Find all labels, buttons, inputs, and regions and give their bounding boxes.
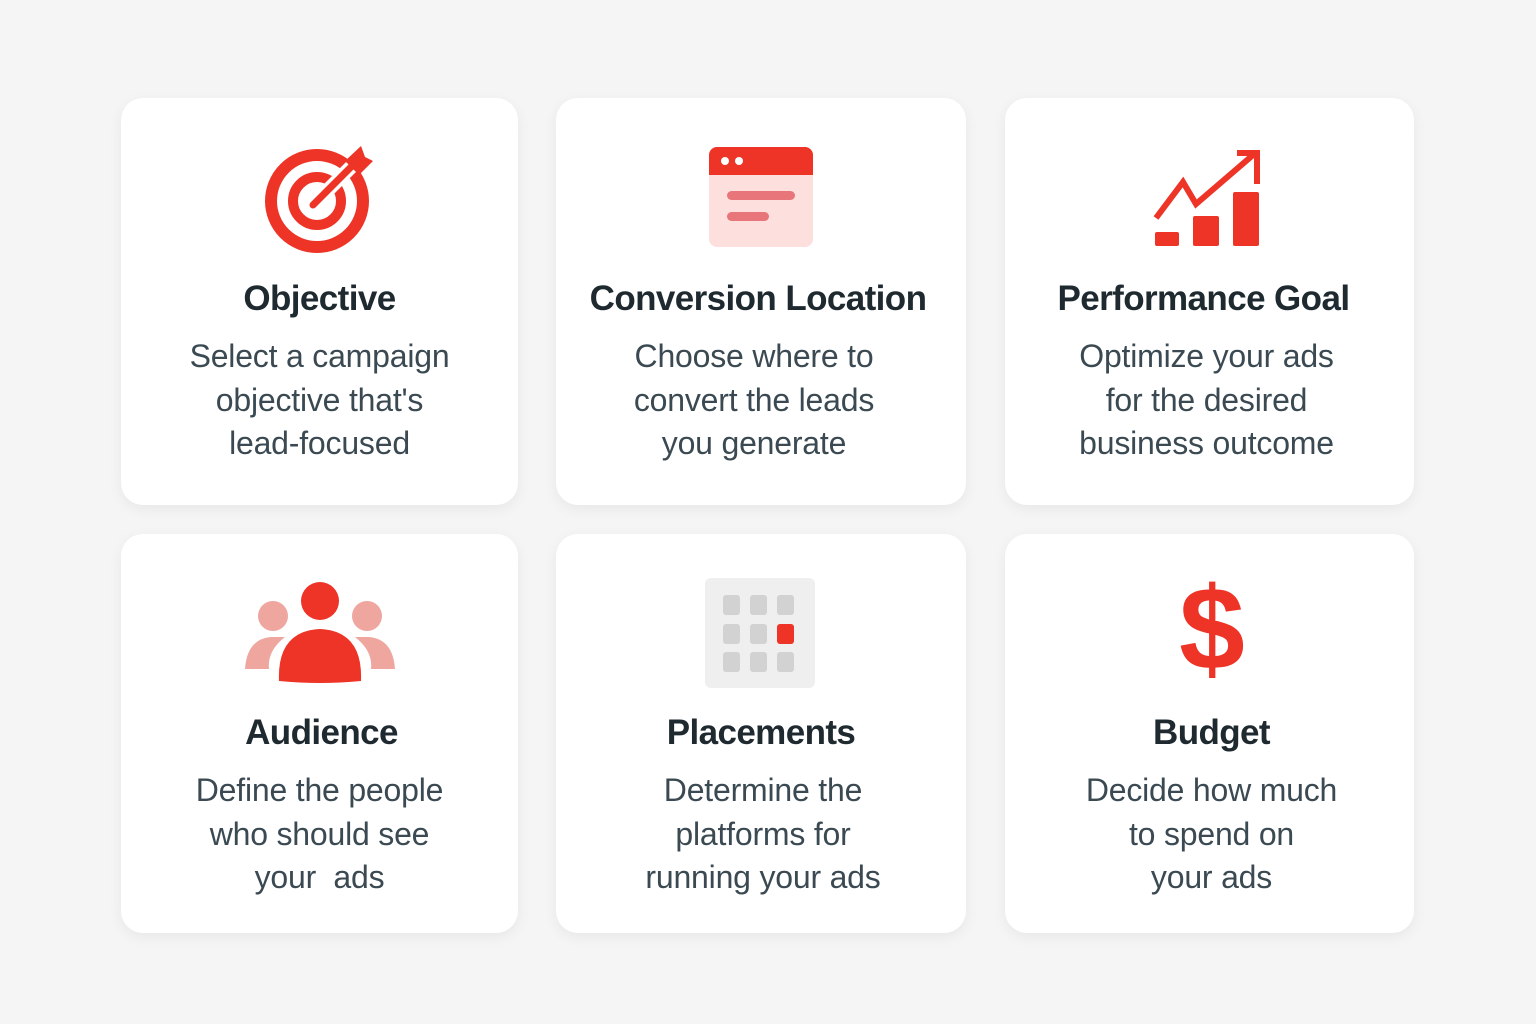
card: conversion location (556, 98, 966, 505)
description: business outcome (1079, 425, 1334, 461)
icon: dollar: $ (1179, 563, 1245, 695)
description: you generate (662, 425, 846, 461)
card: audience (121, 534, 518, 933)
icon: browser window (709, 147, 813, 247)
description (634, 338, 874, 461)
description (1079, 338, 1334, 461)
description: who should see (210, 816, 429, 852)
description: for the desired (1106, 382, 1307, 418)
description: running your ads (645, 859, 881, 895)
description: platforms for (675, 816, 851, 852)
description: to spend on (1129, 816, 1294, 852)
title: Placements (667, 713, 855, 752)
icon: target (265, 146, 373, 253)
icon: growth chart (1154, 150, 1260, 246)
description: objective that's (216, 382, 423, 418)
icon: people (245, 582, 395, 683)
card: performance goal (1005, 98, 1414, 505)
description: Select a campaign (190, 338, 449, 374)
title: Objective (243, 279, 396, 318)
description: convert the leads (634, 382, 874, 418)
description: lead-focused (229, 425, 410, 461)
description: your ads (255, 859, 384, 895)
title: Conversion Location (590, 279, 926, 318)
title: Performance Goal (1058, 279, 1349, 318)
title: Audience (245, 713, 398, 752)
icon: grid (705, 578, 815, 688)
card: placements (556, 534, 966, 933)
description (196, 772, 443, 895)
description (1086, 772, 1337, 895)
title: Budget (1153, 713, 1270, 752)
description: Define the people (196, 772, 443, 808)
description (190, 338, 449, 461)
card: objective (121, 98, 518, 505)
description: your ads (1151, 859, 1272, 895)
description: Choose where to (635, 338, 873, 374)
description: Determine the (664, 772, 862, 808)
card: budget (1005, 534, 1414, 933)
description (645, 772, 881, 895)
description: Decide how much (1086, 772, 1337, 808)
description: Optimize your ads (1079, 338, 1334, 374)
